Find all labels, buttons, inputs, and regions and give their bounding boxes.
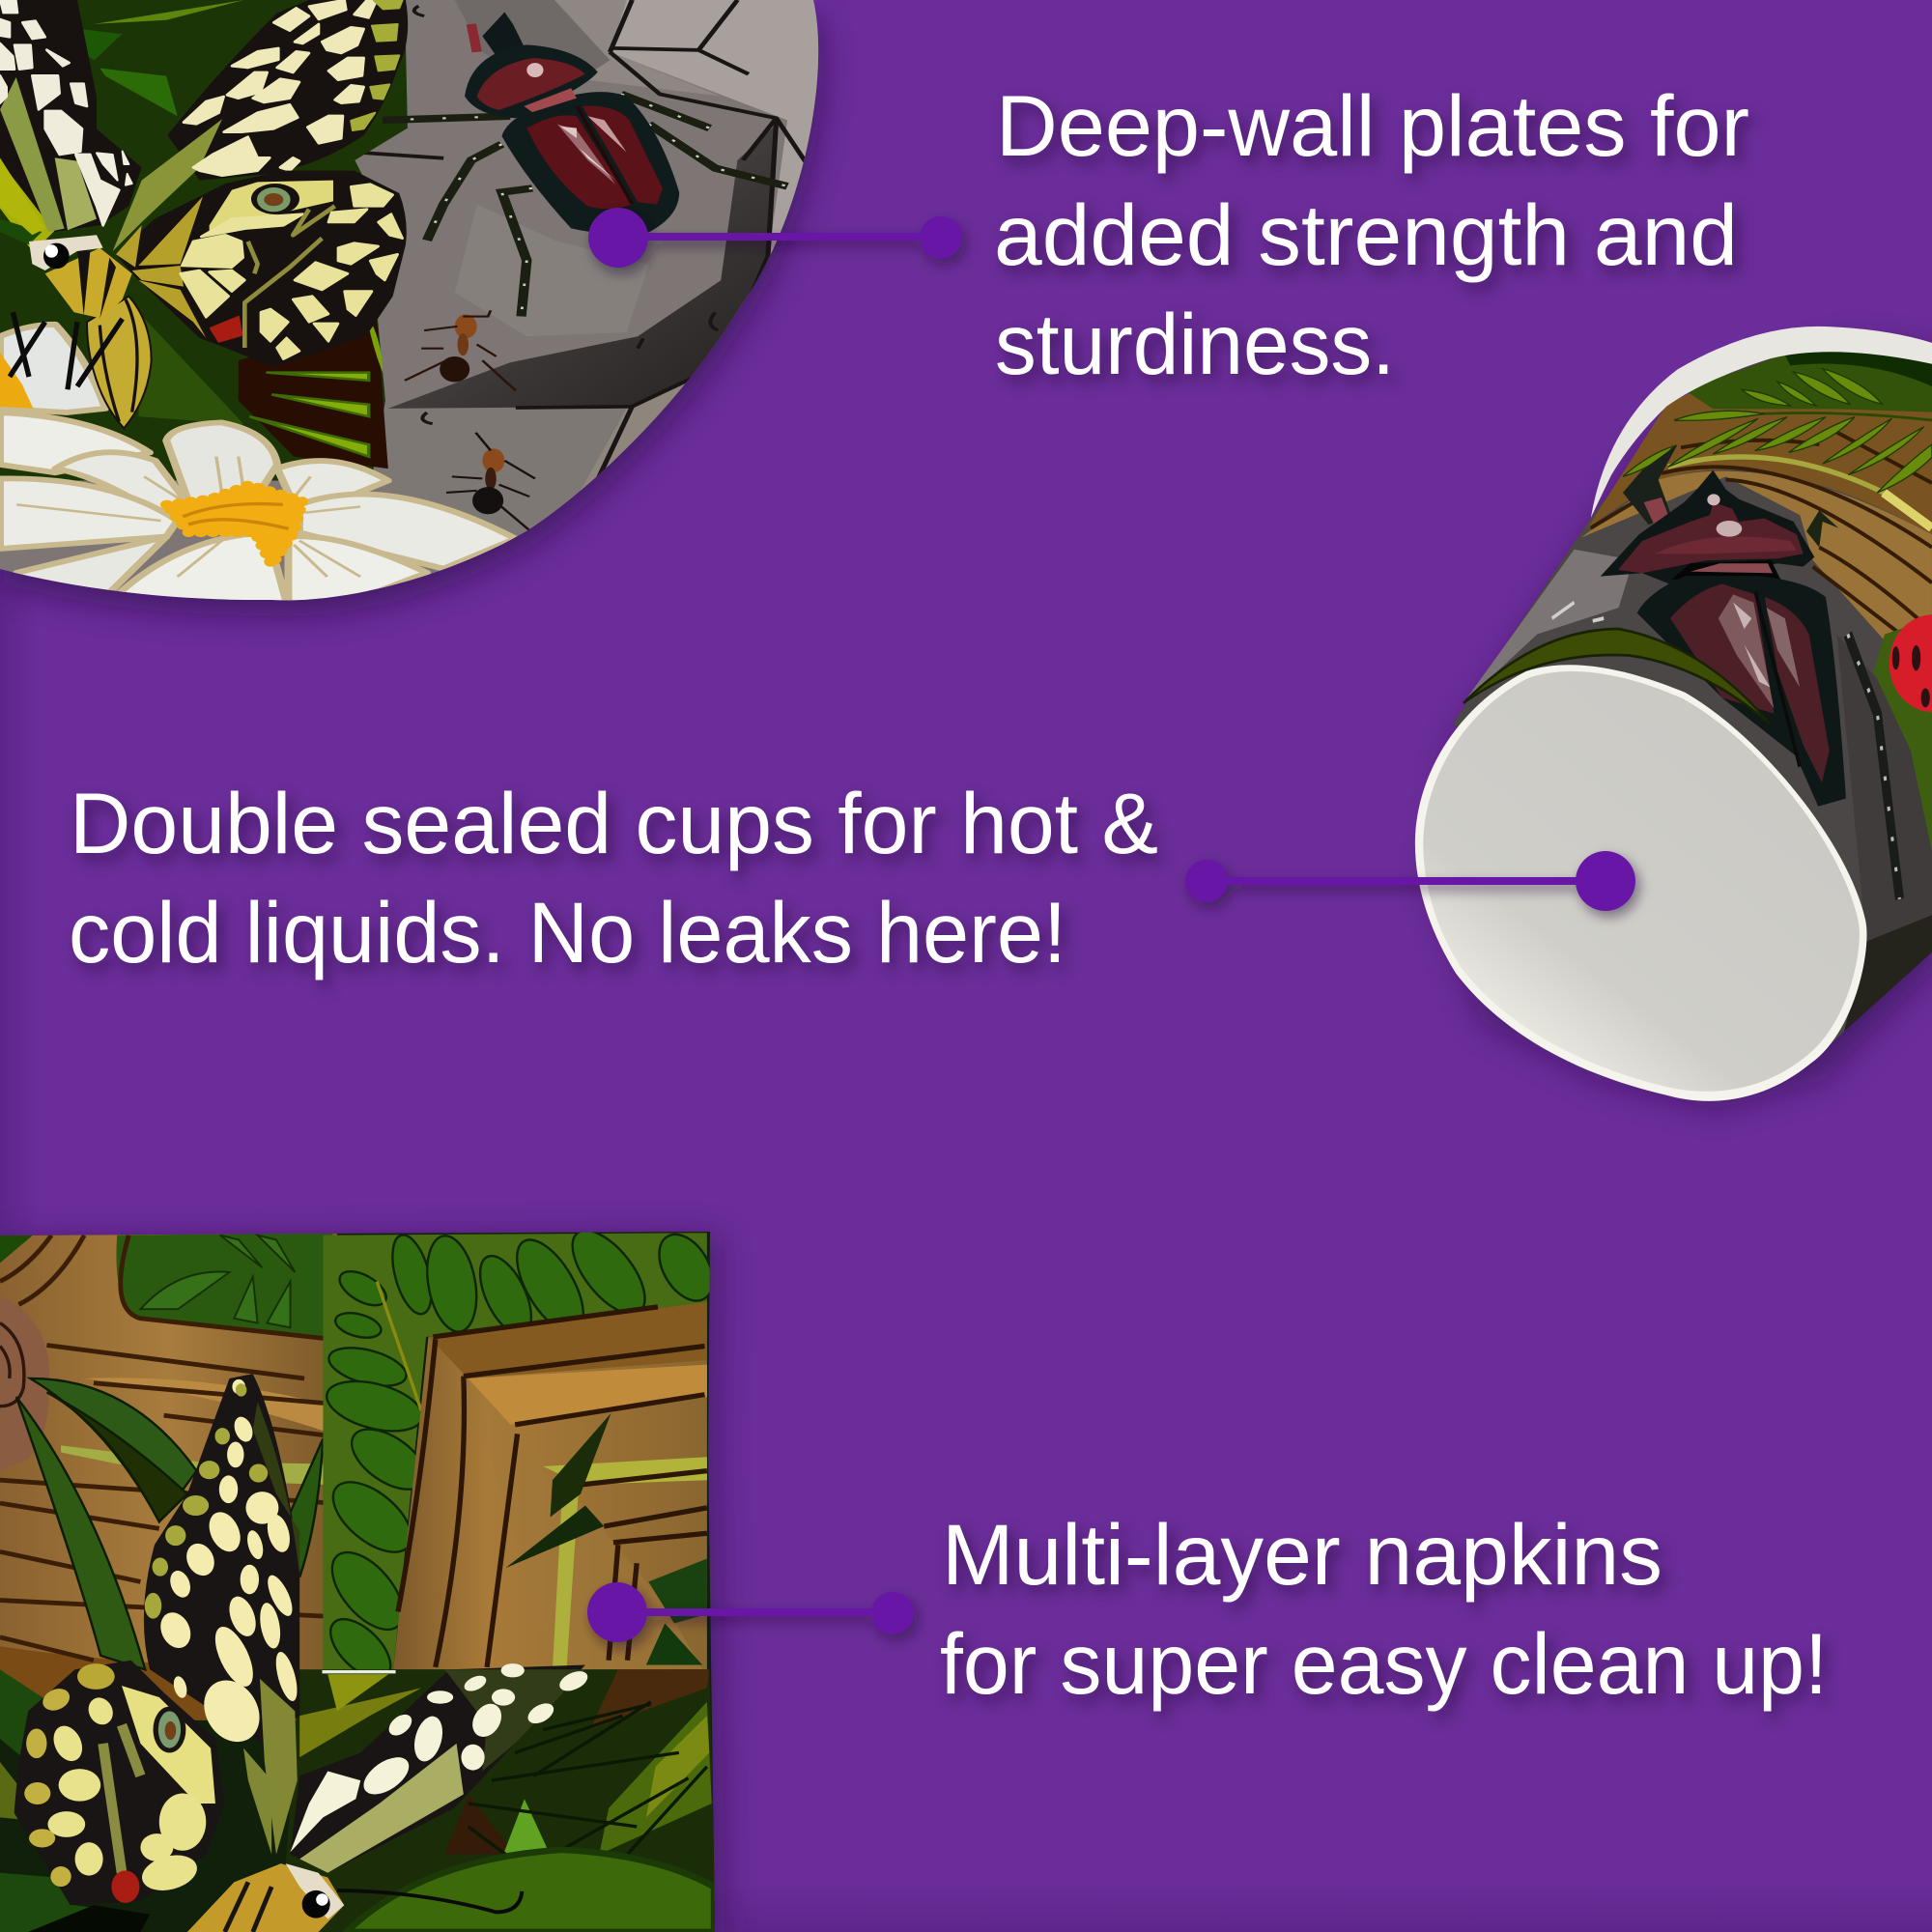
text: plates: sturdiness. [995, 296, 1395, 392]
plate stone background [0, 0, 865, 616]
connector: napkin [587, 1582, 914, 1642]
cup beetle wings [1552, 576, 1899, 899]
napkin grass blades [16, 1378, 323, 1669]
napkin lower jungle [0, 1669, 717, 1932]
cup leaf blade [1463, 629, 1770, 724]
cup beetle head [1601, 444, 1838, 586]
text: napkins [940, 1506, 1828, 1712]
hindwing [116, 171, 407, 367]
body [10, 235, 152, 428]
napkin base [0, 1208, 721, 1932]
panel: cup [1415, 327, 1932, 1109]
text: cups: Double sealed cups for hot & [70, 775, 1158, 871]
panel: napkin [0, 1208, 724, 1932]
text: plates: added strength and [994, 186, 1738, 283]
left wing [0, 0, 142, 244]
forewing [113, 0, 408, 251]
cup wall [1452, 352, 1932, 1053]
plate flower [0, 325, 516, 609]
text: napkins: Multi-layer napkins [942, 1506, 1662, 1603]
cup bottom [1415, 665, 1867, 1101]
connector: cup [1185, 851, 1635, 911]
cup ladybug [1874, 614, 1932, 851]
plate ants [405, 310, 535, 532]
cup wood arcs and palm [1581, 352, 1932, 650]
panel: plate [0, 0, 865, 616]
plate beetle [383, 12, 787, 317]
napkin leaf panel [319, 1219, 724, 1689]
napkin wood corner [393, 1302, 707, 1669]
text: cups: cold liquids. No leaks here! [69, 884, 1066, 980]
cup rim [1591, 327, 1932, 518]
plate jungle foliage [0, 0, 408, 481]
text: plates: Deep-wall plates for [996, 77, 1749, 174]
napkin butterfly [14, 1374, 591, 1932]
plate butterfly [0, 0, 408, 428]
text: cups [69, 775, 1158, 980]
text: plates [994, 77, 1749, 392]
text: napkins: for super easy clean up! [940, 1615, 1828, 1712]
napkin left wood panel [0, 1231, 337, 1720]
connector: plate [588, 208, 962, 268]
